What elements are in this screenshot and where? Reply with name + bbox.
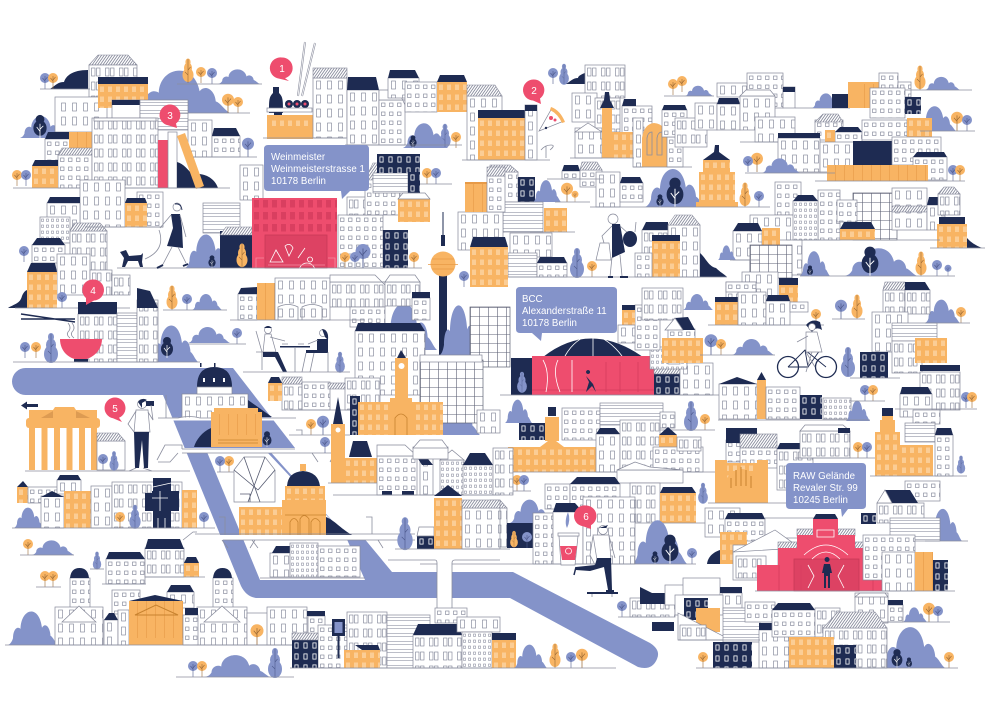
panel: pink RAW hall [757,514,895,591]
orange hut [344,645,380,668]
left panel: temple and sculpture rows [12,402,215,529]
person: cafe couple [243,326,350,373]
person: woman with shopping bags [596,214,637,277]
marker 1 [270,57,293,81]
row: gabled house and navy block [718,365,977,476]
callout: RAW Gelände: RAW Gelände [793,471,855,482]
upper centre houses around the shopper [490,162,727,278]
arrow [21,402,38,410]
marker 3: 3 [167,111,173,122]
icon: dog [120,250,143,267]
icon: pizza slice [539,107,565,158]
bode museum [239,464,326,535]
icon: coffee cup [558,512,579,565]
callout: Weinmeister: Weinmeister [271,152,326,163]
callout: BCC: 10178 Berlin [522,318,577,329]
callout: BCC [516,287,617,341]
parliament dome and bridge [157,363,345,462]
marker 1: 1 [279,64,285,75]
museum island [183,456,415,548]
panel: BCC dome hall [532,334,654,395]
sushi and top center buildings [263,42,565,160]
river [12,368,658,668]
orange ornate facade [715,460,768,503]
callout: Weinmeister [264,145,369,199]
RAW venue [705,481,968,591]
marker 2: 2 [531,86,537,97]
person: photographer [128,399,154,471]
marker 2 [523,79,544,104]
central row under tower [230,275,437,395]
icon: chopsticks and sushi [267,42,315,115]
orange palace [508,407,596,472]
person: skateboarder [574,525,618,597]
river island [187,452,365,580]
book pile [158,132,218,189]
center-right lower buildings [420,400,720,564]
lower right cluster [617,578,958,668]
buildings: left-middle cluster [8,180,246,344]
right cathedral [197,568,247,645]
marker 6: 6 [583,512,589,523]
ramen bowl block [13,288,200,363]
BCC venue [500,288,775,395]
callout: Weinmeister: 10178 Berlin [271,176,326,187]
navy sculpture [145,478,179,528]
person: cyclist [778,321,836,378]
callout: RAW Gelände: 10245 Berlin [793,495,848,506]
glass pavilion [234,457,275,502]
town hall and glass tower [268,305,510,435]
panel: pink Weinmeister store [252,198,337,279]
TV tower [428,212,458,355]
sign post [332,619,345,658]
callout: BCC: BCC [522,294,543,305]
orange ornate hall and RAW neighbours [708,425,875,503]
person: woman walking dog [120,203,188,268]
bottom-left cathedrals block [5,539,325,645]
lamp [219,517,225,535]
callout: Weinmeister: Weinmeisterstrasse 1 [271,164,365,175]
orange concert hall [129,595,183,645]
marker 6 [574,505,596,529]
callout: RAW Gelände [786,463,866,517]
brandenburg style temple [26,407,100,470]
river bridge on right [388,560,500,610]
TV tower block [428,167,508,355]
right middle block around bicycle [708,282,970,378]
domed hall and right middle row [640,145,985,302]
marker 5: 5 [112,404,118,415]
right of island [260,485,510,578]
top-right cluster [743,66,975,181]
bottom buildings [176,608,616,678]
left cathedral [55,568,103,645]
buildings: top-left cluster [12,55,262,189]
callout: RAW Gelände: Revaler Str. 99 [793,483,858,494]
marker 3 [160,104,180,128]
top-middle row of buildings [548,64,850,167]
marker 4: 4 [90,286,96,297]
callout: BCC: Alexanderstraße 11 [522,306,607,317]
marker 4 [82,279,104,305]
orange tower building [875,408,933,476]
middle band: shops near river top [117,154,452,279]
icon: noodle bowl [21,314,102,362]
church and riverside row [328,397,513,495]
orange domed hall [696,145,738,207]
marker 5 [105,398,125,422]
